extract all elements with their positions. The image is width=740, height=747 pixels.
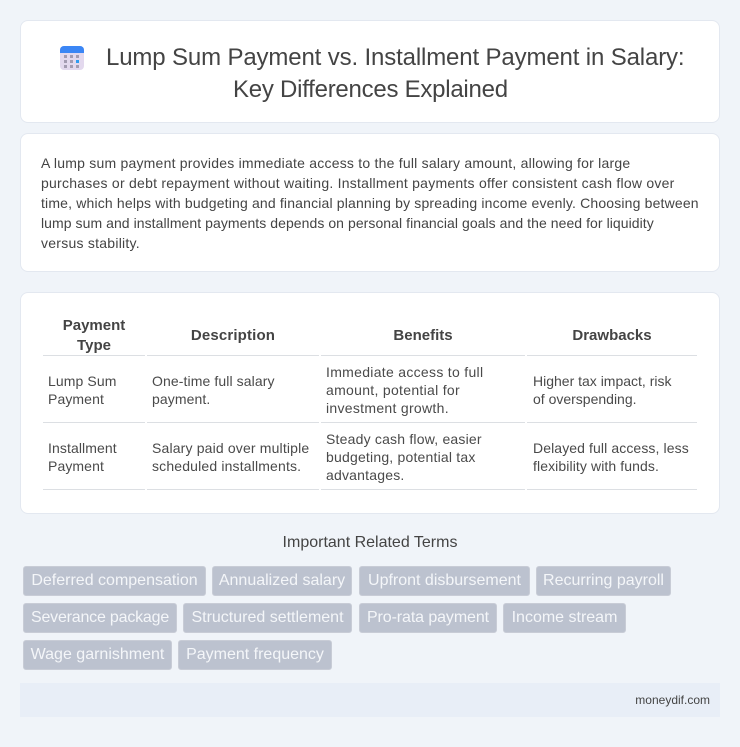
- intro paragraph: A lump sum payment provides immediate access to the full salary amount, allowing for large: [41, 155, 630, 171]
- intro paragraph: purchases or debt repayment without waiting. Installment payments offer consistent cash flow over: [41, 175, 675, 191]
- table row: installment payment: scheduled installments.: [152, 458, 301, 474]
- table row: lump sum payment: Lump Sum: [48, 373, 116, 389]
- panel: comparison table: [20, 292, 720, 514]
- tag list: related terms: Upfront disbursement: [368, 572, 521, 589]
- title: [106, 44, 684, 103]
- table row: installment payment: Installment: [48, 440, 117, 456]
- table row: installment payment: flexibility with funds.: [533, 458, 659, 474]
- tag list: related terms: Structured settlement: [191, 609, 344, 626]
- tag list: related terms: Payment frequency: [186, 646, 324, 663]
- tag list: related terms: Deferred compensation: [31, 572, 198, 589]
- tag list: related terms: Recurring payroll: [543, 572, 664, 589]
- footer bar: [20, 683, 720, 717]
- title: Key Differences Explained: [233, 76, 508, 103]
- tag list: related terms: Severance package: [31, 609, 169, 626]
- table row: installment payment: Payment: [48, 458, 104, 474]
- table row: installment payment: Steady cash flow, easier: [326, 431, 482, 447]
- footer source label: moneydif.com: [635, 693, 710, 707]
- table row: lump sum payment: [48, 364, 672, 416]
- related terms heading: Important Related Terms: [283, 534, 457, 551]
- tag list: related terms: Annualized salary: [219, 572, 345, 589]
- table row: installment payment: [48, 431, 689, 483]
- icon: calendar: [60, 46, 84, 70]
- intro paragraph: [41, 155, 699, 251]
- table row: lump sum payment: of overspending.: [533, 391, 637, 407]
- table row: lump sum payment: Immediate access to full: [326, 364, 483, 380]
- table row: lump sum payment: payment.: [152, 391, 210, 407]
- table header: Benefits: [393, 327, 453, 344]
- table row: lump sum payment: Higher tax impact, risk: [533, 373, 671, 389]
- table header: Drawbacks: [572, 327, 652, 344]
- table row: lump sum payment: investment growth.: [326, 400, 449, 416]
- panel: intro text card: [20, 133, 720, 272]
- tag list: related terms: [23, 566, 671, 670]
- table row: installment payment: advantages.: [326, 467, 404, 483]
- intro paragraph: time, which helps with budgeting and financial planning by spreading income evenly. Choosing between: [41, 195, 699, 211]
- tag list: related terms: Wage garnishment: [31, 646, 164, 663]
- table header: Payment: [63, 317, 125, 334]
- panel: title card: [20, 20, 720, 123]
- tag list: related terms: Pro-rata payment: [367, 609, 489, 626]
- table row: installment payment: budgeting, potential tax: [326, 449, 476, 465]
- intro paragraph: versus stability.: [41, 235, 140, 251]
- table row: installment payment: Salary paid over multiple: [152, 440, 309, 456]
- table header: Type: [77, 337, 111, 354]
- table header: [63, 317, 652, 354]
- title: Lump Sum Payment vs. Installment Payment in Salary:: [106, 44, 684, 71]
- table row: lump sum payment: One-time full salary: [152, 373, 275, 389]
- table row: lump sum payment: amount, potential for: [326, 382, 460, 398]
- intro paragraph: lump sum and installment payments depends on personal financial goals and the need for liquidity: [41, 215, 654, 231]
- table row: installment payment: Delayed full access, less: [533, 440, 689, 456]
- table header: Description: [191, 327, 275, 344]
- table row: lump sum payment: Payment: [48, 391, 104, 407]
- tag list: related terms: Income stream: [512, 609, 617, 626]
